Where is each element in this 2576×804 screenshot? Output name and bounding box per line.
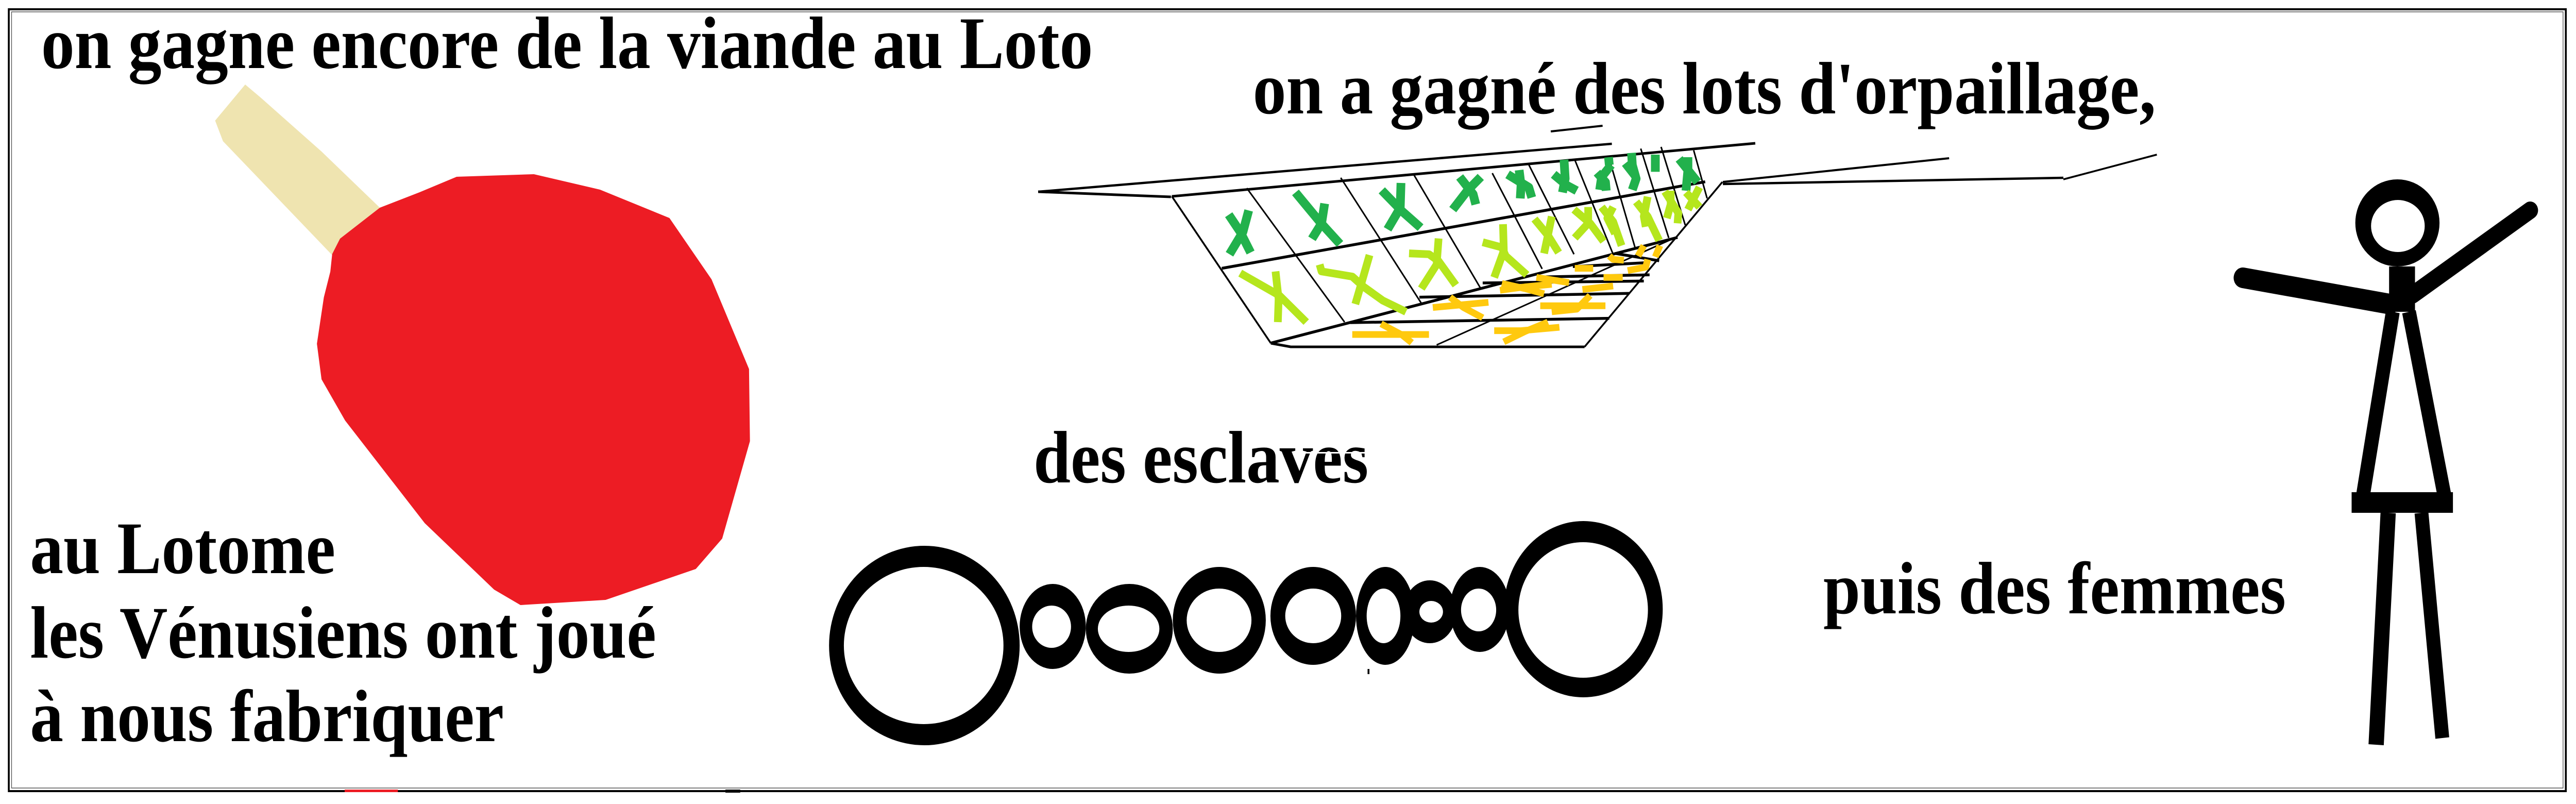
- icon: ping-pong paddle: [215, 85, 750, 605]
- orange crosses: [1352, 246, 1660, 343]
- pit flaps and outline: [1038, 126, 2157, 347]
- text block: au Lotome les Vénusiens ont joué à nous fabriquer: les Vénusiens ont joué: [30, 592, 656, 674]
- paddle red blade: [317, 174, 750, 605]
- text block: au Lotome les Vénusiens ont joué à nous fabriquer: au Lotome: [30, 507, 335, 590]
- paddle handle: [215, 85, 380, 255]
- heading: on a gagné des lots d'orpaillage: on a gagné des lots d'orpaillage,: [1253, 47, 2156, 130]
- text block: au Lotome les Vénusiens ont joué à nous fabriquer: à nous fabriquer: [30, 675, 504, 758]
- heading: puis des femmes: puis des femmes: [1823, 547, 2286, 630]
- heading: des esclaves: des esclaves: [1033, 416, 1368, 499]
- icon: slave chain of rings: [829, 521, 1663, 745]
- dark green crosses: [1229, 153, 1698, 254]
- icon: stick-figure woman: [2243, 179, 2530, 745]
- icon: gold-panning pit with plots: [1038, 126, 2157, 347]
- plot grid thick lines: [1222, 182, 1705, 343]
- heading: on gagne encore de la viande au Loto: on gagne encore de la viande au Loto: [41, 2, 1093, 85]
- plot grid thin lines: [1247, 147, 1707, 345]
- text block: au Lotome les Vénusiens ont joué à nous fabriquer: [30, 507, 656, 758]
- lime crosses: [1240, 187, 1700, 322]
